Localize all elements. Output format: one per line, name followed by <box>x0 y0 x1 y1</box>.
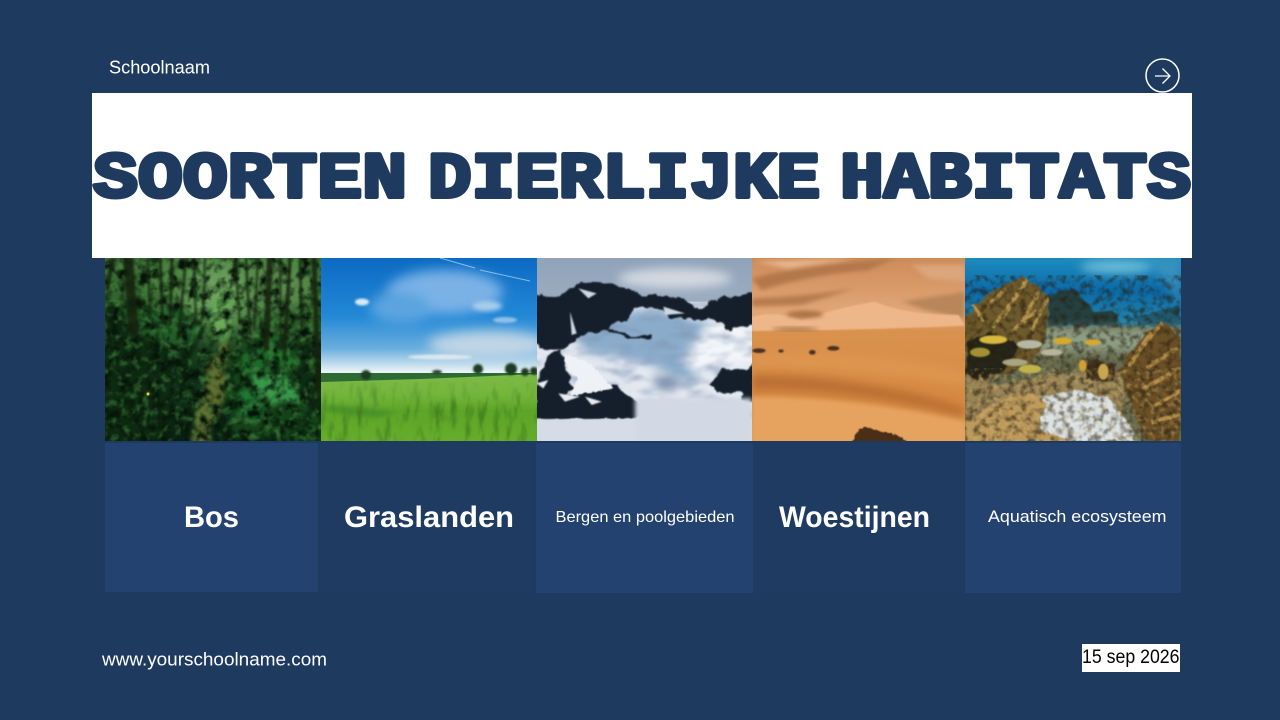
photo: aquatic ecosystem <box>965 255 1182 442</box>
panel: Woestijnen <box>753 443 964 592</box>
title <box>93 143 1191 217</box>
panel: Woestijnen: Woestijnen <box>779 501 930 534</box>
panel: Bergen en poolgebieden <box>536 443 753 593</box>
panel: Graslanden <box>320 443 534 592</box>
title: HABITATS <box>840 143 1191 217</box>
school name: Schoolnaam <box>109 58 210 78</box>
title: SOORTEN <box>93 143 407 217</box>
title: DIERLIJKE <box>428 143 820 217</box>
panel: Graslanden: Graslanden <box>344 501 514 534</box>
panel: Aquatisch ecosysteem: Aquatisch ecosysteem <box>988 507 1166 526</box>
photo: forest <box>105 258 321 441</box>
icon: arrow in circle <box>1146 59 1179 92</box>
panel: Bergen en poolgebieden: Bergen en poolgebieden <box>556 509 734 526</box>
title banner <box>92 93 1192 258</box>
website: www.yourschoolname.com <box>101 650 327 670</box>
panel: Bos: Bos <box>184 501 239 534</box>
photo: grassland <box>321 258 548 441</box>
panel: Bos <box>105 443 318 592</box>
photo: desert <box>752 255 967 445</box>
panel: Aquatisch ecosysteem <box>965 443 1181 593</box>
date badge: 15 sep 2026 <box>1082 647 1180 668</box>
photo: mountains and polar regions <box>537 258 752 441</box>
